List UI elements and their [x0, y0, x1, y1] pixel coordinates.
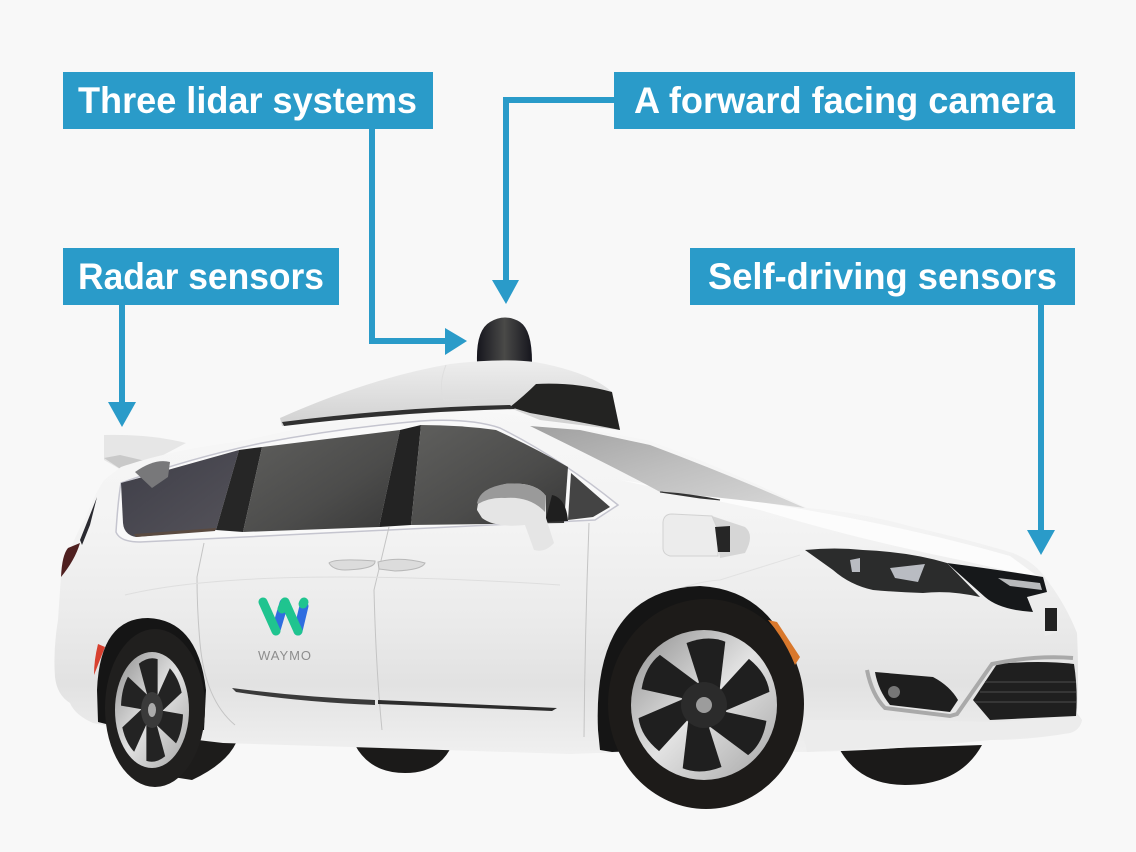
- rear quarter window: [121, 450, 239, 537]
- pod seam: [441, 365, 510, 400]
- windshield: [530, 426, 805, 508]
- door handles: [329, 559, 425, 571]
- rear wheel shadow: [160, 735, 236, 780]
- pod dark band: [510, 384, 620, 430]
- Waymo logo: [258, 602, 311, 663]
- arrow: sensors label to front bumper: [1027, 305, 1055, 555]
- fog lamp housing: [875, 672, 958, 712]
- arrow: camera label to dome: [492, 97, 614, 304]
- dome lidar: [477, 318, 532, 362]
- pod underside: [282, 405, 515, 426]
- label: Three lidar systems: Three lidar systems: [78, 80, 417, 121]
- roof sensor pod: [280, 318, 620, 430]
- fog lamp: [888, 686, 900, 698]
- chrome bumper frame: [867, 657, 1073, 716]
- far side wheels: [355, 745, 982, 785]
- logo wordmark: WAYMO: [258, 648, 311, 663]
- car body: [54, 409, 1082, 754]
- lower front grille: [973, 662, 1077, 720]
- roof chrome trim: [116, 420, 618, 542]
- headlight: [805, 548, 980, 597]
- grille chrome badge: [998, 578, 1042, 590]
- headlight detail: [850, 558, 925, 582]
- rear tail light: [61, 497, 105, 675]
- chrome side strips: [232, 688, 375, 705]
- small quarter glass: [568, 473, 610, 520]
- label: A forward facing camera: [614, 72, 1075, 129]
- arrow: lidar label to dome: [369, 129, 467, 355]
- illustration: Waymo self-driving minivan: [54, 318, 1082, 809]
- logo mark: [263, 602, 304, 631]
- grille slats: [975, 682, 1076, 702]
- side windows: [121, 425, 610, 537]
- door pillar: [379, 425, 421, 527]
- fender sensor: [663, 514, 750, 558]
- side mirror: [477, 484, 554, 551]
- pillar: [216, 447, 262, 532]
- label: Radar sensors: Radar sensors: [78, 256, 324, 297]
- rear wheel: [105, 629, 205, 787]
- label: Self-driving sensors: [690, 248, 1075, 305]
- label: Radar sensors: [63, 248, 339, 305]
- middle window: [243, 430, 400, 532]
- wiper cowl: [660, 492, 720, 500]
- hood highlight: [620, 480, 1040, 578]
- rear window reflection: [135, 461, 170, 488]
- arrow: radar label to spoiler: [108, 305, 136, 427]
- label: A forward facing camera: A forward facing camera: [634, 80, 1055, 121]
- label: Self-driving sensors: Self-driving sensors: [708, 256, 1057, 297]
- rear spoiler sensor: [104, 435, 186, 472]
- door seams: [125, 523, 800, 737]
- orange side marker: [768, 620, 800, 665]
- front bumper sensor: [1027, 597, 1060, 636]
- front window: [411, 425, 568, 525]
- front wheel: [608, 599, 804, 809]
- upper grille: [947, 563, 1047, 612]
- wheel arches: [97, 586, 798, 752]
- rear window base strip: [134, 528, 216, 537]
- label: Three lidar systems: [63, 72, 433, 129]
- lower front bumper highlight: [800, 716, 1082, 752]
